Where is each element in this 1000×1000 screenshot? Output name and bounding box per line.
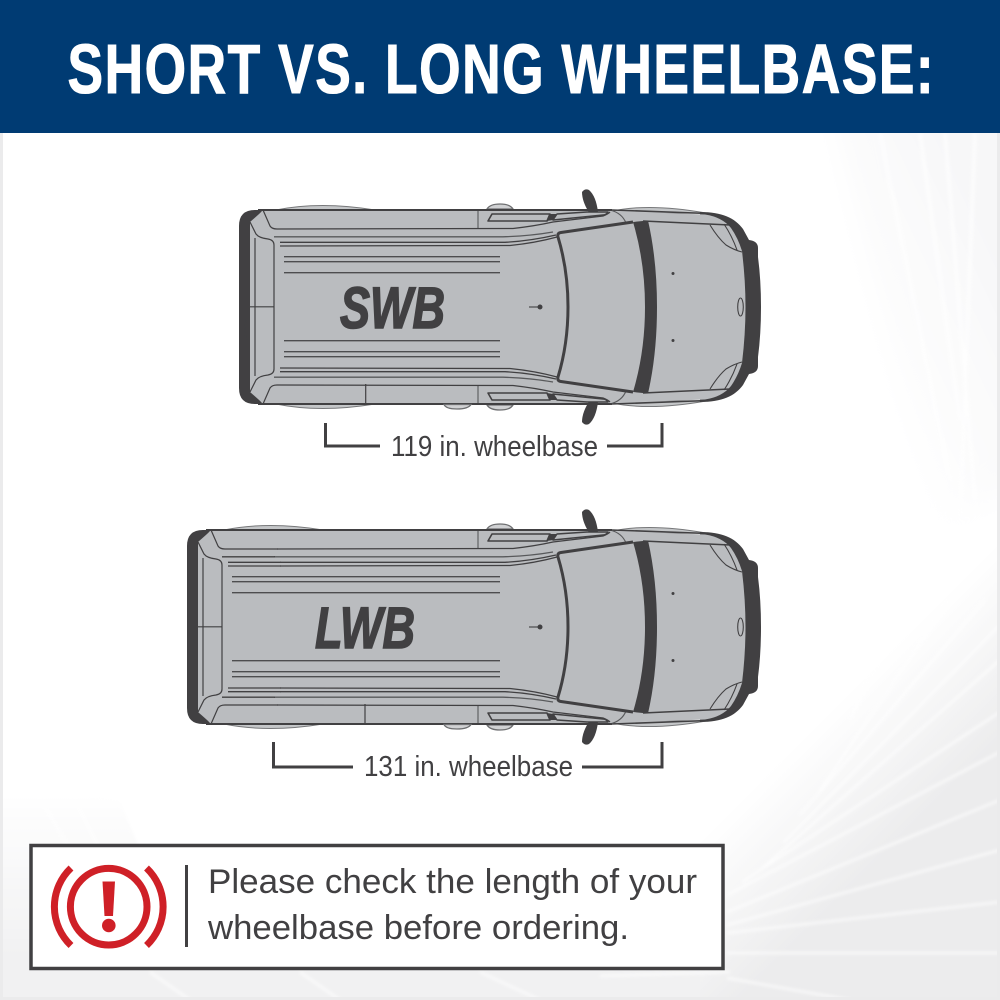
callout box — [31, 846, 723, 968]
callout text: wheelbase before ordering. — [207, 909, 629, 947]
front badge — [738, 298, 743, 316]
icon: brake warning — [54, 868, 163, 946]
SWB label: SWB — [340, 276, 445, 341]
dimension: 119 in. wheelbase: 119 in. wheelbase — [391, 431, 598, 463]
dimension: 119 in. wheelbase — [326, 423, 662, 463]
rear door seams and handle — [193, 627, 365, 723]
LWB label: LWB — [315, 596, 415, 661]
front badge — [738, 618, 743, 636]
title: SHORT VS. LONG WHEELBASE: — [68, 31, 935, 109]
dimension: 131 in. wheelbase: 131 in. wheelbase — [364, 751, 573, 783]
rear door seams and handle — [245, 307, 366, 403]
body side edges — [258, 210, 612, 404]
long roof lines — [222, 549, 281, 705]
antenna — [529, 304, 542, 310]
roof ribs — [232, 577, 500, 677]
body side edges — [206, 530, 612, 724]
side step — [444, 404, 471, 409]
side step — [444, 724, 471, 729]
callout text: Please check the length of your — [208, 863, 697, 901]
header band — [0, 0, 1000, 133]
van: short wheelbase — [239, 189, 761, 425]
antenna — [529, 624, 542, 630]
divider — [185, 865, 188, 947]
dimension: 131 in. wheelbase — [274, 742, 662, 783]
roof ribs — [284, 257, 500, 357]
van: long wheelbase — [187, 509, 761, 745]
